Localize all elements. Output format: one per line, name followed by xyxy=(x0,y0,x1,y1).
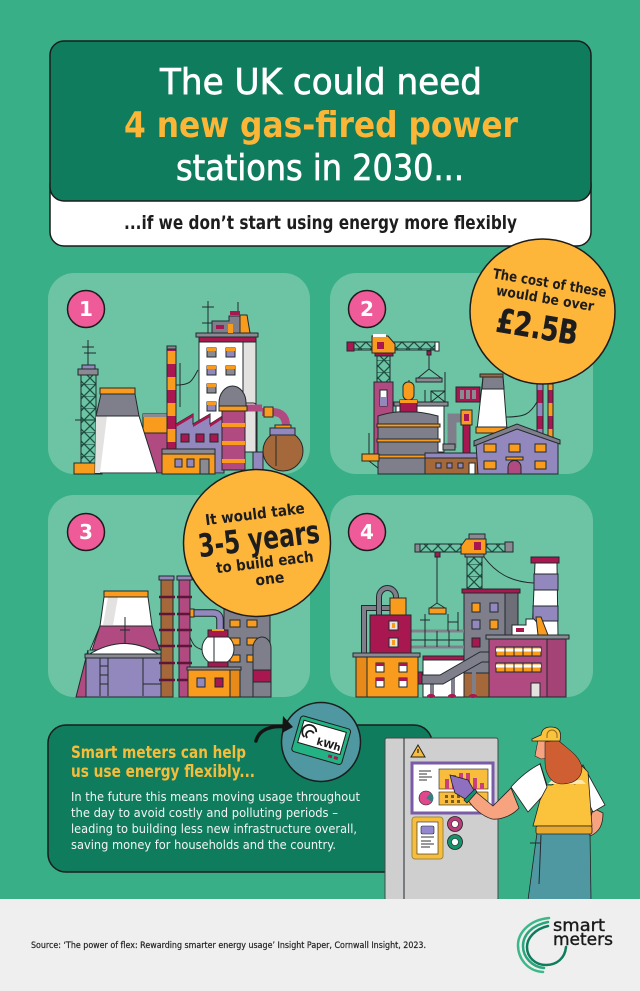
callout: build time: to build each xyxy=(215,547,315,577)
worker at control panel xyxy=(450,727,605,900)
number badge 4: 4 xyxy=(360,520,374,544)
callout: build time xyxy=(184,470,330,616)
panel: smart meter explanation xyxy=(48,725,432,872)
panel: smart meter explanation: In the future this means moving usage throughout xyxy=(71,790,360,804)
footer band xyxy=(0,899,640,991)
panel: number 4 power station xyxy=(330,495,593,698)
number badge 3 xyxy=(68,514,104,550)
number badge 3: 3 xyxy=(79,520,93,544)
number badge 1: 1 xyxy=(79,297,93,321)
source note: Source: ‘The power of flex: Rewarding smarter energy usage’ Insight Paper, Cornwall Insight, 2023. xyxy=(31,941,426,951)
number badge 4 xyxy=(348,514,386,550)
logo: smart meters: meters xyxy=(553,930,613,950)
panel: number 1 power station xyxy=(48,273,310,474)
number badge 2 xyxy=(348,290,386,328)
panel: number 3 power station xyxy=(48,495,310,697)
title block: stations in 2030... xyxy=(176,148,464,189)
callout: cost xyxy=(470,239,615,384)
panel: number 2 power station xyxy=(330,273,593,474)
icon: smart meter xyxy=(282,702,360,782)
panel: smart meter explanation: us use energy flexibly... xyxy=(71,762,255,781)
callout: build time: one xyxy=(254,568,285,590)
icon: smart meter: kWh xyxy=(315,737,342,754)
panel: smart meter explanation: leading to building less new infrastructure overall, xyxy=(71,822,357,836)
logo: smart meters xyxy=(518,916,613,972)
title block xyxy=(50,41,591,246)
logo: smart meters: smart xyxy=(553,916,605,936)
callout: cost: £2.5B xyxy=(494,301,581,353)
panel: smart meter explanation: saving money for households and the country. xyxy=(71,838,336,852)
number badge 2: 2 xyxy=(360,297,374,321)
arrow to smart meter xyxy=(256,716,293,741)
callout: cost: would be over xyxy=(495,283,595,315)
control cabinet xyxy=(385,738,498,900)
title block: The UK could need xyxy=(159,62,482,103)
panel: smart meter explanation: the day to avoid costly and polluting periods – xyxy=(71,806,338,820)
title block: 4 new gas-fired power xyxy=(124,105,518,146)
number badge 1 xyxy=(68,290,104,328)
callout: cost: The cost of these xyxy=(492,266,608,301)
panel: smart meter explanation: Smart meters can help xyxy=(71,743,246,762)
title block: ...if we don’t start using energy more flexibly xyxy=(124,212,517,234)
callout: build time: 3-5 years xyxy=(196,513,322,565)
callout: build time: It would take xyxy=(204,499,306,529)
